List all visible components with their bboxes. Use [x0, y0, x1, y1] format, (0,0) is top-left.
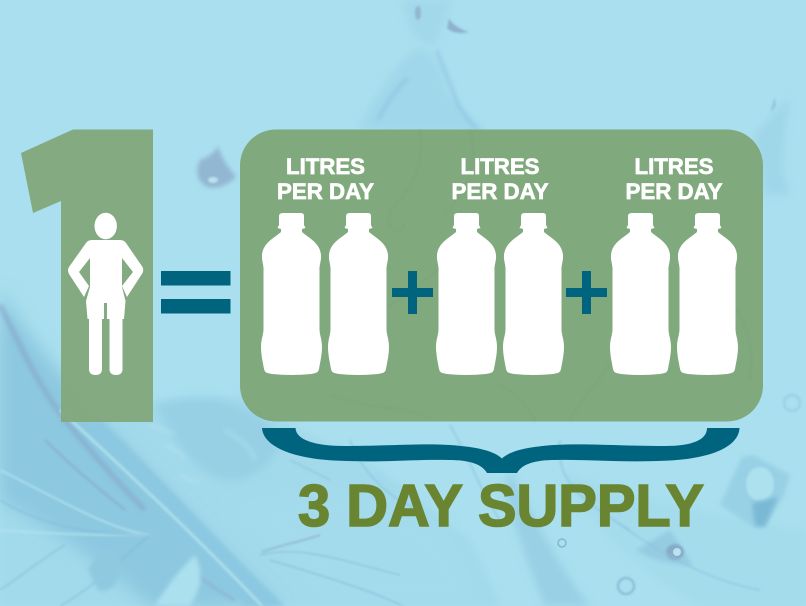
label: day two: LITRES [460, 154, 540, 179]
lower water mass [0, 330, 500, 606]
label: day two: PER DAY [452, 179, 549, 204]
label: day three [626, 154, 723, 204]
central splash rising behind panel [358, 50, 490, 132]
panel: daily water supply [240, 130, 763, 422]
wave streaks [0, 305, 145, 510]
bubbles right [720, 455, 790, 528]
icon: bottle 2 [328, 213, 389, 375]
equals sign [161, 271, 230, 314]
veins behind panel [330, 130, 751, 421]
numeral 1 [21, 130, 153, 422]
icon: bottle 5 [610, 213, 671, 375]
caption: 3 day supply: 3 DAY SUPPLY [298, 473, 704, 539]
icon: bottle 4 [503, 213, 564, 375]
label: day one: LITRES [286, 154, 365, 179]
droplet [197, 146, 236, 188]
curly brace [262, 428, 740, 473]
numeral one with person [21, 130, 153, 422]
icon: bottle 1 [261, 213, 322, 375]
icon: bottle 3 [436, 213, 497, 375]
right splash [770, 97, 776, 113]
main wave band [0, 290, 280, 606]
pale foam patches [155, 555, 200, 606]
icon: bottle 6 [677, 213, 738, 375]
label: day three: PER DAY [626, 179, 723, 204]
label: day three: LITRES [634, 154, 714, 179]
foam texture near panel corner [150, 425, 255, 482]
label: day one [277, 154, 374, 204]
label: day two [452, 154, 549, 204]
icon: person [68, 213, 143, 375]
label: day one: PER DAY [277, 179, 374, 204]
plus sign 2 [566, 271, 607, 314]
plus sign 1 [392, 271, 433, 314]
